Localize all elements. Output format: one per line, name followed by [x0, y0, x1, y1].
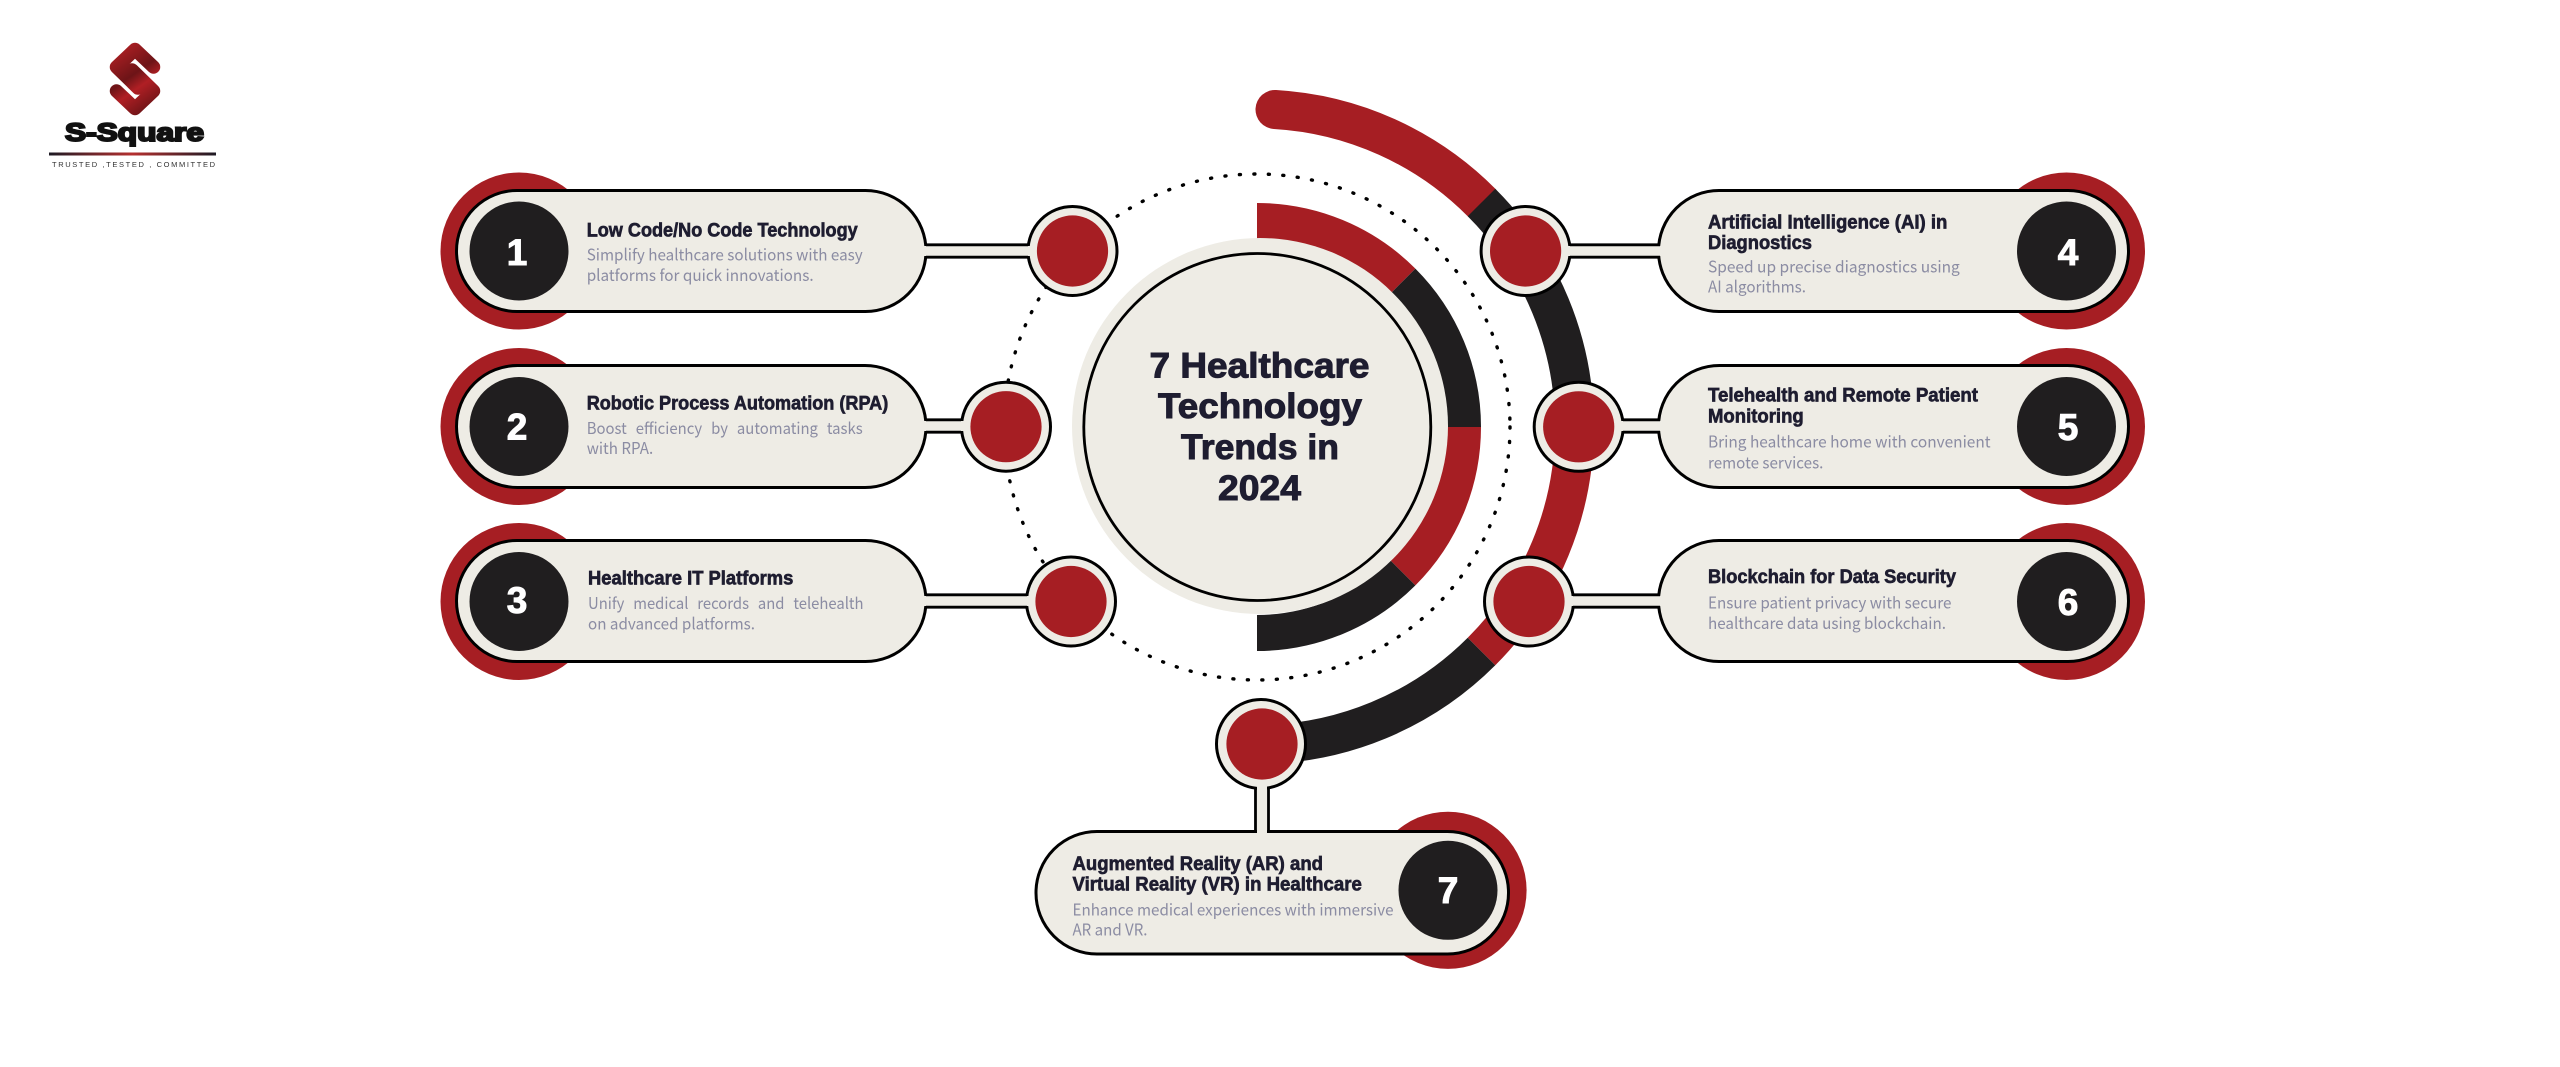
card 5: Telehealth and Remote Patient Monitoring: 5 [2058, 407, 2078, 448]
card 1: Low Code/No Code Technology [440, 172, 1117, 330]
card 5 text: Telehealth and Remote Patient [1708, 385, 1978, 407]
dotted orbit ring [1004, 174, 1510, 680]
card 4: Artificial Intelligence in Diagnostics [1481, 172, 2145, 330]
card 7: Augmented and Virtual Reality [1036, 700, 1527, 969]
card 7 text [1072, 853, 1394, 941]
card 4 text: Speed up precise diagnostics using [1708, 254, 1960, 278]
card 4 text: AI algorithms. [1708, 274, 1806, 298]
card 6: Blockchain for Data Security [1484, 523, 2145, 680]
card 7 text: Enhance medical experiences with immersive [1072, 896, 1394, 920]
card 5 text [1708, 385, 1991, 473]
card 1 text: platforms for quick innovations. [587, 262, 814, 286]
card 5 text: Monitoring [1708, 405, 1804, 427]
logo tagline: TRUSTED ,TESTED , COMMITTED [52, 160, 216, 169]
card 1 text: Simplify healthcare solutions with easy [587, 242, 863, 266]
logo wordmark: S-Square [65, 119, 204, 147]
card 4 text [1708, 211, 1960, 298]
card 1 text [587, 220, 863, 286]
card 6 text: healthcare data using blockchain. [1708, 610, 1946, 634]
card 2 text: Robotic Process Automation (RPA) [587, 392, 888, 414]
card 2 text: Boost efficiency by automating tasks [587, 415, 863, 439]
title: 2024 [1218, 469, 1302, 508]
card 1: Low Code/No Code Technology: 1 [507, 232, 527, 273]
card 6 text [1708, 566, 1956, 634]
inner segmented ring [1257, 221, 1463, 633]
title: Trends in [1181, 428, 1339, 467]
card 5: Telehealth and Remote Patient Monitoring [1534, 348, 2145, 505]
title: Technology [1158, 387, 1363, 426]
card 3: Healthcare IT Platforms [440, 523, 1116, 680]
card 4 text: Artificial Intelligence (AI) in [1708, 211, 1947, 233]
card 6 text: Blockchain for Data Security [1708, 566, 1956, 588]
card 6 text: Ensure patient privacy with secure [1708, 589, 1952, 613]
title: 7 Healthcare [1150, 346, 1370, 386]
logo: S-Square [49, 50, 216, 169]
card 7 text: Augmented Reality (AR) and [1072, 853, 1323, 875]
card 5 text: Bring healthcare home with convenient [1708, 428, 1991, 452]
outer segmented arc [1257, 110, 1574, 744]
card 3 text: on advanced platforms. [588, 610, 755, 634]
card 7 text: Virtual Reality (VR) in Healthcare [1072, 873, 1362, 895]
card 1 text: Low Code/No Code Technology [587, 220, 858, 242]
card 3 text [588, 567, 864, 634]
title [1150, 346, 1370, 508]
central title disc [1072, 238, 1448, 614]
card 2: Robotic Process Automation: 2 [507, 406, 527, 448]
card 3 text: Unify medical records and telehealth [588, 590, 864, 614]
logo rule [49, 152, 216, 156]
card 5 text: remote services. [1708, 449, 1823, 473]
card 7 text: AR and VR. [1072, 917, 1148, 941]
card 2 text [587, 392, 888, 459]
card 2 text: with RPA. [587, 435, 653, 459]
card 7: Augmented and Virtual Reality: 7 [1438, 870, 1458, 911]
card 6: Blockchain for Data Security: 6 [2058, 582, 2078, 623]
card 4: Artificial Intelligence in Diagnostics: 4 [2058, 232, 2079, 273]
icon: S-Square diamond mark [116, 50, 154, 108]
card 3: Healthcare IT Platforms: 3 [507, 580, 527, 621]
card 2: Robotic Process Automation [440, 348, 1050, 505]
card 3 text: Healthcare IT Platforms [588, 567, 793, 589]
card 4 text: Diagnostics [1708, 232, 1812, 254]
